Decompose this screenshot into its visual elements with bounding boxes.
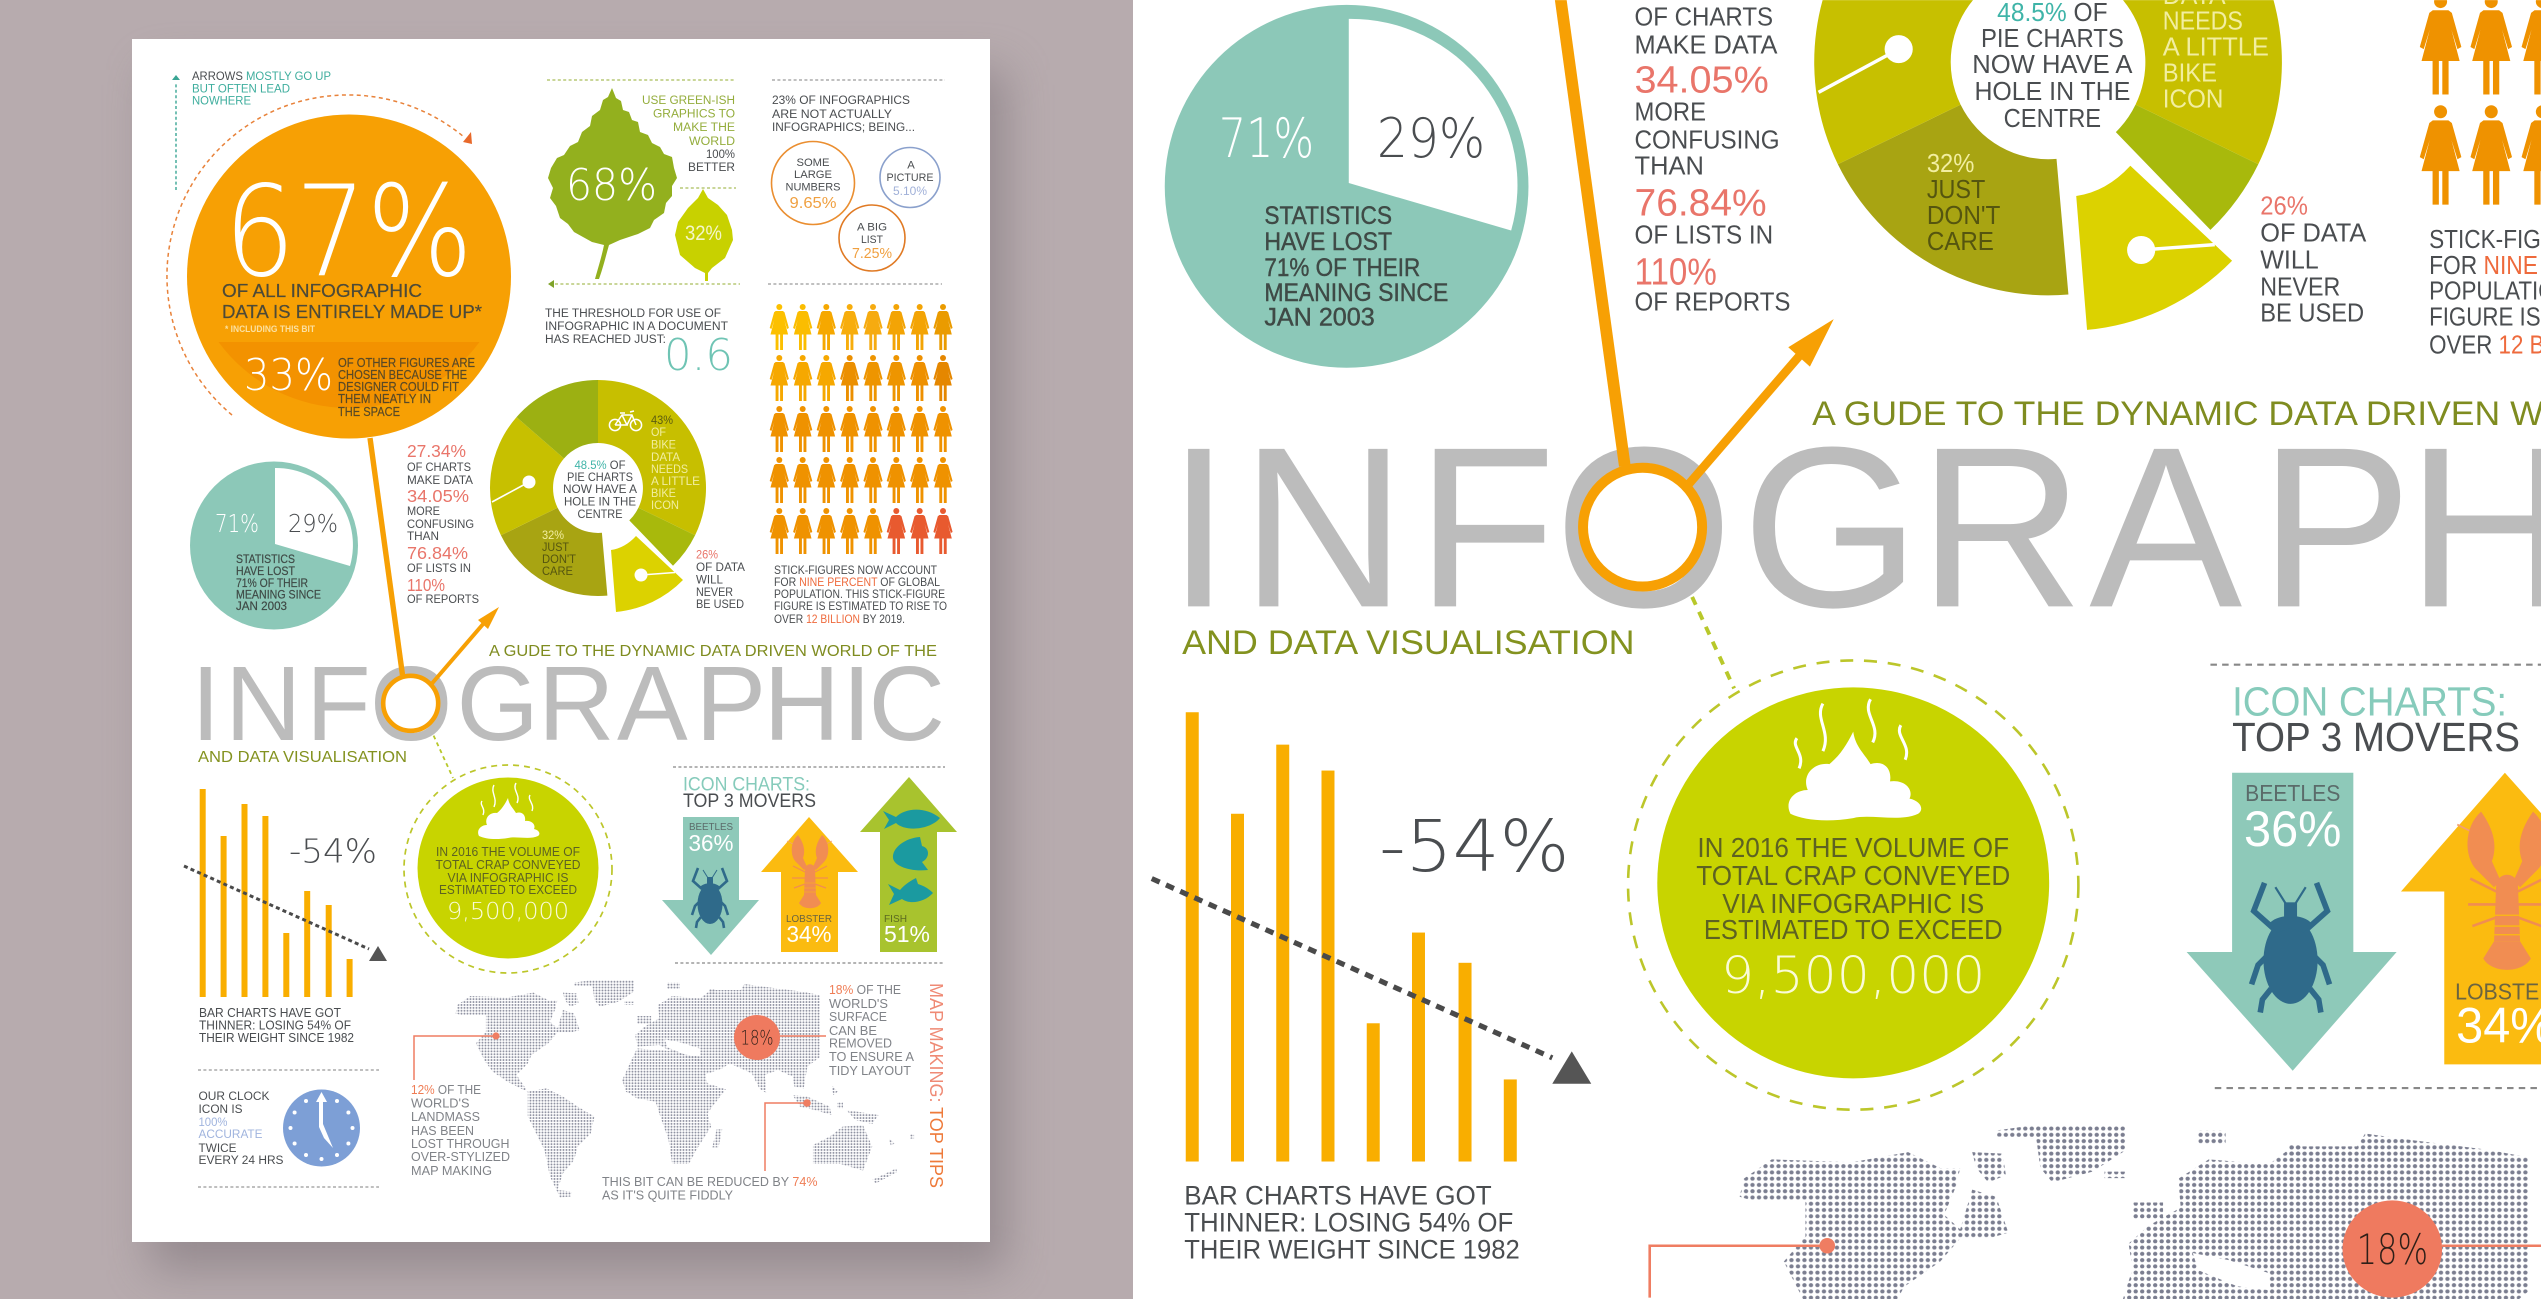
zoom: donut chart: OF DATA [2260, 219, 2366, 247]
zoom: dotted world map [1740, 1125, 2530, 1299]
map callouts: THIS BIT CAN BE REDUCED BY 74% [602, 1174, 818, 1189]
bar chart [184, 789, 387, 1045]
teal pie chart [190, 462, 358, 630]
donut chart: DATA [651, 450, 680, 464]
zoom: orange connector ring and arrow [1554, 0, 1834, 587]
zoom: teal pie chart: 71% OF THEIR [1264, 254, 1420, 282]
donut chart: OF [651, 425, 666, 439]
donut chart: 48.5% OF [574, 458, 626, 472]
arrow note [172, 69, 331, 190]
zoom: stick figure caption [2429, 226, 2541, 360]
zoom: donut chart: 32% [1927, 150, 1974, 178]
map callouts: HAS BEEN [411, 1123, 474, 1138]
clock block [198, 1070, 379, 1187]
zoom: donut chart: WILL [2260, 246, 2319, 274]
clock block: ACCURATE [198, 1127, 262, 1141]
map callouts: REMOVED [829, 1036, 892, 1050]
not actually infographics block: PICTURE [886, 172, 934, 184]
subtitle: AND DATA VISUALISATION [198, 749, 407, 766]
teal pie chart: HAVE LOST [236, 565, 295, 578]
confusing charts list [407, 441, 479, 606]
donut chart: ICON [651, 498, 679, 512]
zoom: crap circle: 9,500,000 [1721, 946, 1985, 1005]
zoom: confusing charts list: MORE [1635, 98, 1706, 126]
zoom: donut chart: HOLE IN THE [1974, 78, 2130, 106]
bar chart: THINNER: LOSING 54% OF [199, 1018, 351, 1032]
big orange circle 67%: * INCLUDING THIS BIT [225, 324, 315, 335]
zoom: confusing charts list: CONFUSING [1635, 127, 1780, 154]
map callouts: OVER-STYLIZED [411, 1149, 510, 1164]
icon charts block: TOP 3 MOVERS [683, 791, 816, 812]
bar chart: THEIR WEIGHT SINCE 1982 [199, 1031, 354, 1045]
donut chart: CARE [542, 564, 573, 578]
map callouts: TIDY LAYOUT [829, 1063, 911, 1078]
not actually infographics block: A [907, 160, 915, 172]
poster sheet: full infographic overview [132, 39, 990, 1242]
donut chart [490, 380, 745, 612]
big orange circle 67%: CHOSEN BECAUSE THE [338, 368, 467, 382]
not actually infographics block: INFOGRAPHICS; BEING... [772, 120, 915, 134]
not actually infographics block [768, 80, 945, 284]
zoom: donut chart: ICON [2163, 85, 2223, 113]
poster shadow [150, 70, 1006, 1270]
clock block: TWICE [198, 1141, 236, 1155]
confusing charts list: CONFUSING [407, 517, 474, 531]
leaf block: WORLD [689, 134, 735, 148]
zoom: donut chart: BIKE [2163, 60, 2217, 88]
zoom: confusing charts list: 110% [1635, 252, 1717, 294]
teal pie chart: JAN 2003 [236, 600, 287, 613]
zoom: donut chart: CARE [1927, 228, 1994, 256]
threshold text: HAS REACHED JUST: [545, 332, 666, 346]
zoom: icon charts: 36% [2244, 801, 2341, 857]
not actually infographics block: 5.10% [893, 184, 927, 198]
zoom: donut chart: PIE CHARTS [1981, 25, 2124, 53]
zoom: icon charts: ICON CHARTS: [2232, 679, 2507, 724]
zoom: donut chart: DON'T [1927, 202, 2000, 230]
zoom: crap circle: TOTAL CRAP CONVEYED [1696, 860, 2010, 891]
big orange circle 67%: DATA IS ENTIRELY MADE UP* [222, 301, 482, 322]
big orange circle 67% [167, 95, 511, 438]
icon charts block: 36% [688, 830, 734, 856]
clock block: ICON IS [198, 1102, 242, 1116]
stick figure caption: STICK-FIGURES NOW ACCOUNT [774, 563, 937, 577]
zoom: map callouts [1650, 1200, 2541, 1298]
map callouts [411, 982, 914, 1202]
leaf block: MAKE THE [673, 120, 735, 134]
background: mauve wall [0, 0, 1133, 1299]
icon charts block: 51% [884, 921, 930, 947]
zoom: donut chart: NOW HAVE A [1972, 51, 2133, 79]
big orange circle 67%: THEM NEATLY IN [338, 392, 431, 406]
leaf block: 32% [685, 222, 722, 245]
confusing charts list: 27.34% [407, 441, 466, 461]
confusing charts list: 110% [407, 575, 445, 595]
leaf block [547, 80, 740, 288]
donut chart: HOLE IN THE [564, 494, 636, 508]
dotted world map [456, 980, 914, 1197]
stick figure caption: FOR NINE PERCENT OF GLOBAL [774, 575, 940, 589]
zoom: confusing charts list: THAN [1635, 152, 1704, 180]
zoom: confusing charts list: MAKE DATA [1635, 31, 1778, 59]
zoom: crap circle: ESTIMATED TO EXCEED [1704, 914, 2003, 945]
map callouts: 18% [740, 1026, 774, 1050]
stick figure caption [774, 563, 947, 626]
leaf block: USE GREEN-ISH [642, 93, 735, 107]
crap circle: TOTAL CRAP CONVEYED [436, 857, 580, 872]
zoom: teal pie chart: HAVE LOST [1264, 228, 1392, 256]
zoom: confusing charts list: 76.84% [1635, 182, 1767, 224]
stick figures pictogram [770, 304, 953, 554]
threshold text: 0.6 [664, 330, 733, 381]
clock block: EVERY 24 HRS [198, 1153, 284, 1167]
zoom: confusing charts list: 34.05% [1635, 59, 1769, 101]
arrow note: ARROWS MOSTLY GO UP [192, 69, 331, 83]
map callouts: WORLD'S [829, 996, 888, 1011]
donut chart: 43% [651, 413, 673, 427]
not actually infographics block: 7.25% [852, 245, 892, 262]
zoom: dashed connector [1692, 597, 1734, 688]
donut chart: NOW HAVE A [563, 482, 637, 496]
zoom: bar chart: -54% [1379, 805, 1570, 888]
leaf block: 100% [706, 147, 735, 161]
orange connector ring and arrow [370, 438, 499, 731]
crap circle: VIA INFOGRAPHIC IS [448, 870, 568, 885]
donut chart: BIKE [651, 486, 676, 500]
dashed connector to crap circle [434, 736, 453, 778]
big orange circle 67%: OF ALL INFOGRAPHIC [222, 280, 422, 301]
teal pie chart: 71% OF THEIR [236, 577, 308, 590]
crap circle [404, 765, 612, 973]
zoom: donut chart: JUST [1927, 176, 1985, 204]
donut chart: NEEDS [651, 462, 688, 476]
map callouts: 12% OF THE [411, 1082, 481, 1097]
not actually infographics block: NUMBERS [786, 182, 841, 194]
zoom: crap circle [1628, 660, 2078, 1110]
zoom: teal pie chart: MEANING SINCE [1264, 279, 1448, 307]
threshold text: INFOGRAPHIC IN A DOCUMENT [545, 319, 728, 333]
confusing charts list: MAKE DATA [407, 473, 473, 487]
zoom: donut chart [1814, 0, 2366, 330]
zoom: teal pie chart [1165, 5, 1528, 368]
stick figure caption: POPULATION. THIS STICK-FIGURE [774, 587, 945, 601]
donut chart: JUST [542, 540, 569, 554]
zoom: donut chart: 26% [2260, 192, 2308, 220]
zoom: icon charts: BEETLES [2245, 780, 2340, 806]
not actually infographics block: LARGE [794, 169, 832, 181]
clock block: 100% [198, 1115, 228, 1129]
teal pie chart: 71% [215, 509, 259, 538]
donut chart: NEVER [696, 585, 733, 599]
big orange circle 67%: THE SPACE [338, 405, 400, 419]
map callouts: SURFACE [829, 1009, 887, 1024]
big orange circle 67%: DESIGNER COULD FIT [338, 380, 459, 394]
not actually infographics block: SOME [796, 157, 830, 169]
bar chart: -54% [289, 832, 377, 870]
confusing charts list: THAN [407, 529, 439, 543]
zoom: donut chart: NEVER [2260, 273, 2340, 301]
not actually infographics block: LIST [861, 234, 883, 246]
icon charts block: ICON CHARTS: [683, 774, 810, 796]
clock block: OUR CLOCK [198, 1089, 270, 1103]
map callouts: WORLD'S [411, 1096, 470, 1110]
not actually infographics block: 23% OF INFOGRAPHICS [772, 93, 910, 107]
leaf block: BETTER [688, 160, 735, 174]
not actually infographics block: ARE NOT ACTUALLY [772, 107, 892, 121]
zoom: confusing charts list: OF LISTS IN [1635, 222, 1773, 250]
zoom: confusing charts list [1635, 0, 1790, 316]
zoom: bar chart: THINNER: LOSING 54% OF [1184, 1207, 1513, 1238]
donut chart: A LITTLE [651, 474, 700, 488]
map callouts: MAP MAKING [411, 1163, 492, 1178]
zoom: donut chart: CENTRE [2004, 105, 2101, 133]
icon charts block: 34% [786, 921, 832, 947]
crap circle: ESTIMATED TO EXCEED [439, 882, 577, 897]
not actually infographics block: A BIG [857, 222, 887, 234]
big orange circle 67%: 67% [224, 158, 473, 305]
big orange circle 67%: OF OTHER FIGURES ARE [338, 356, 475, 370]
icon charts block: LOBSTER [786, 913, 832, 925]
crap circle: IN 2016 THE VOLUME OF [436, 844, 580, 859]
zoom: bar chart: THEIR WEIGHT SINCE 1982 [1184, 1234, 1520, 1265]
donut chart: WILL [696, 572, 723, 586]
teal pie chart: STATISTICS [236, 553, 295, 566]
map making vertical heading: MAP MAKING: TOP TIPS [926, 983, 946, 1188]
zoom: stick figures [2420, 0, 2541, 205]
donut chart: BE USED [696, 597, 744, 611]
donut chart: CENTRE [578, 507, 623, 521]
zoom: teal pie chart: 29% [1377, 107, 1485, 170]
zoom: crap circle: IN 2016 THE VOLUME OF [1697, 832, 2009, 863]
zoom: confusing charts list: OF CHARTS [1635, 3, 1773, 31]
donut chart: OF DATA [696, 560, 745, 574]
leaf block: 68% [566, 160, 657, 211]
arrow note: BUT OFTEN LEAD [192, 81, 290, 95]
zoom: bar chart: BAR CHARTS HAVE GOT [1184, 1180, 1492, 1211]
map callouts: LANDMASS [411, 1109, 480, 1124]
donut chart: BIKE [651, 438, 676, 452]
zoom: map callouts: 18% [2357, 1225, 2428, 1274]
donut chart: 32% [542, 528, 564, 542]
teal pie chart: MEANING SINCE [236, 588, 321, 602]
big orange circle 67%: 33% [244, 350, 333, 401]
icon charts block: BEETLES [689, 821, 733, 833]
confusing charts list: 34.05% [407, 486, 469, 506]
map callouts: CAN BE [829, 1023, 877, 1038]
threshold text [545, 306, 733, 381]
teal pie chart: 29% [288, 509, 338, 538]
zoom: bar chart [1152, 712, 1591, 1265]
zoom: teal pie chart: STATISTICS [1264, 202, 1392, 230]
zoom: donut chart: BE USED [2260, 299, 2364, 327]
stick figure caption: FIGURE IS ESTIMATED TO RISE TO [774, 599, 947, 613]
leaf block: GRAPHICS TO [653, 106, 735, 120]
magnified poster content [1152, 0, 2541, 1299]
zoom: crap circle: VIA INFOGRAPHIC IS [1722, 888, 1984, 919]
confusing charts list: OF REPORTS [407, 592, 479, 606]
panel: magnified detail view [1133, 0, 2541, 1299]
zoom: teal pie chart: 71% [1219, 107, 1314, 170]
zoom: donut chart: A LITTLE [2163, 34, 2269, 62]
map callouts: LOST THROUGH [411, 1136, 510, 1151]
title: INFOGRAPHIC [191, 645, 945, 763]
stick figure caption: OVER 12 BILLION BY 2019. [774, 612, 905, 626]
zoom: icon charts: TOP 3 MOVERS [2232, 714, 2520, 760]
confusing charts list: OF CHARTS [407, 460, 471, 474]
donut chart: PIE CHARTS [567, 470, 633, 484]
map callouts: TO ENSURE A [829, 1049, 914, 1064]
threshold text: THE THRESHOLD FOR USE OF [545, 306, 721, 320]
arrow note: NOWHERE [192, 94, 251, 108]
tagline: A GUDE TO THE DYNAMIC DATA DRIVEN WORLD OF THE [489, 643, 937, 660]
icon charts block [662, 767, 957, 963]
donut chart: 26% [696, 548, 718, 562]
confusing charts list: 76.84% [407, 543, 468, 563]
map callouts: 18% OF THE [829, 982, 901, 997]
confusing charts list: OF LISTS IN [407, 561, 471, 575]
zoom: donut chart: NEEDS [2163, 8, 2243, 36]
zoom: icon charts [2187, 665, 2541, 1088]
crap circle: 9,500,000 [447, 897, 569, 925]
donut chart: DON'T [542, 552, 576, 566]
map callouts: AS IT'S QUITE FIDDLY [602, 1188, 733, 1202]
zoom: subtitle: AND DATA VISUALISATION [1182, 624, 1635, 662]
not actually infographics block: 9.65% [790, 195, 837, 212]
zoom: confusing charts list: OF REPORTS [1635, 289, 1790, 316]
confusing charts list: MORE [407, 504, 440, 518]
icon charts block: FISH [884, 913, 907, 925]
bar chart: BAR CHARTS HAVE GOT [199, 1006, 341, 1020]
zoom: teal pie chart: JAN 2003 [1264, 304, 1375, 332]
